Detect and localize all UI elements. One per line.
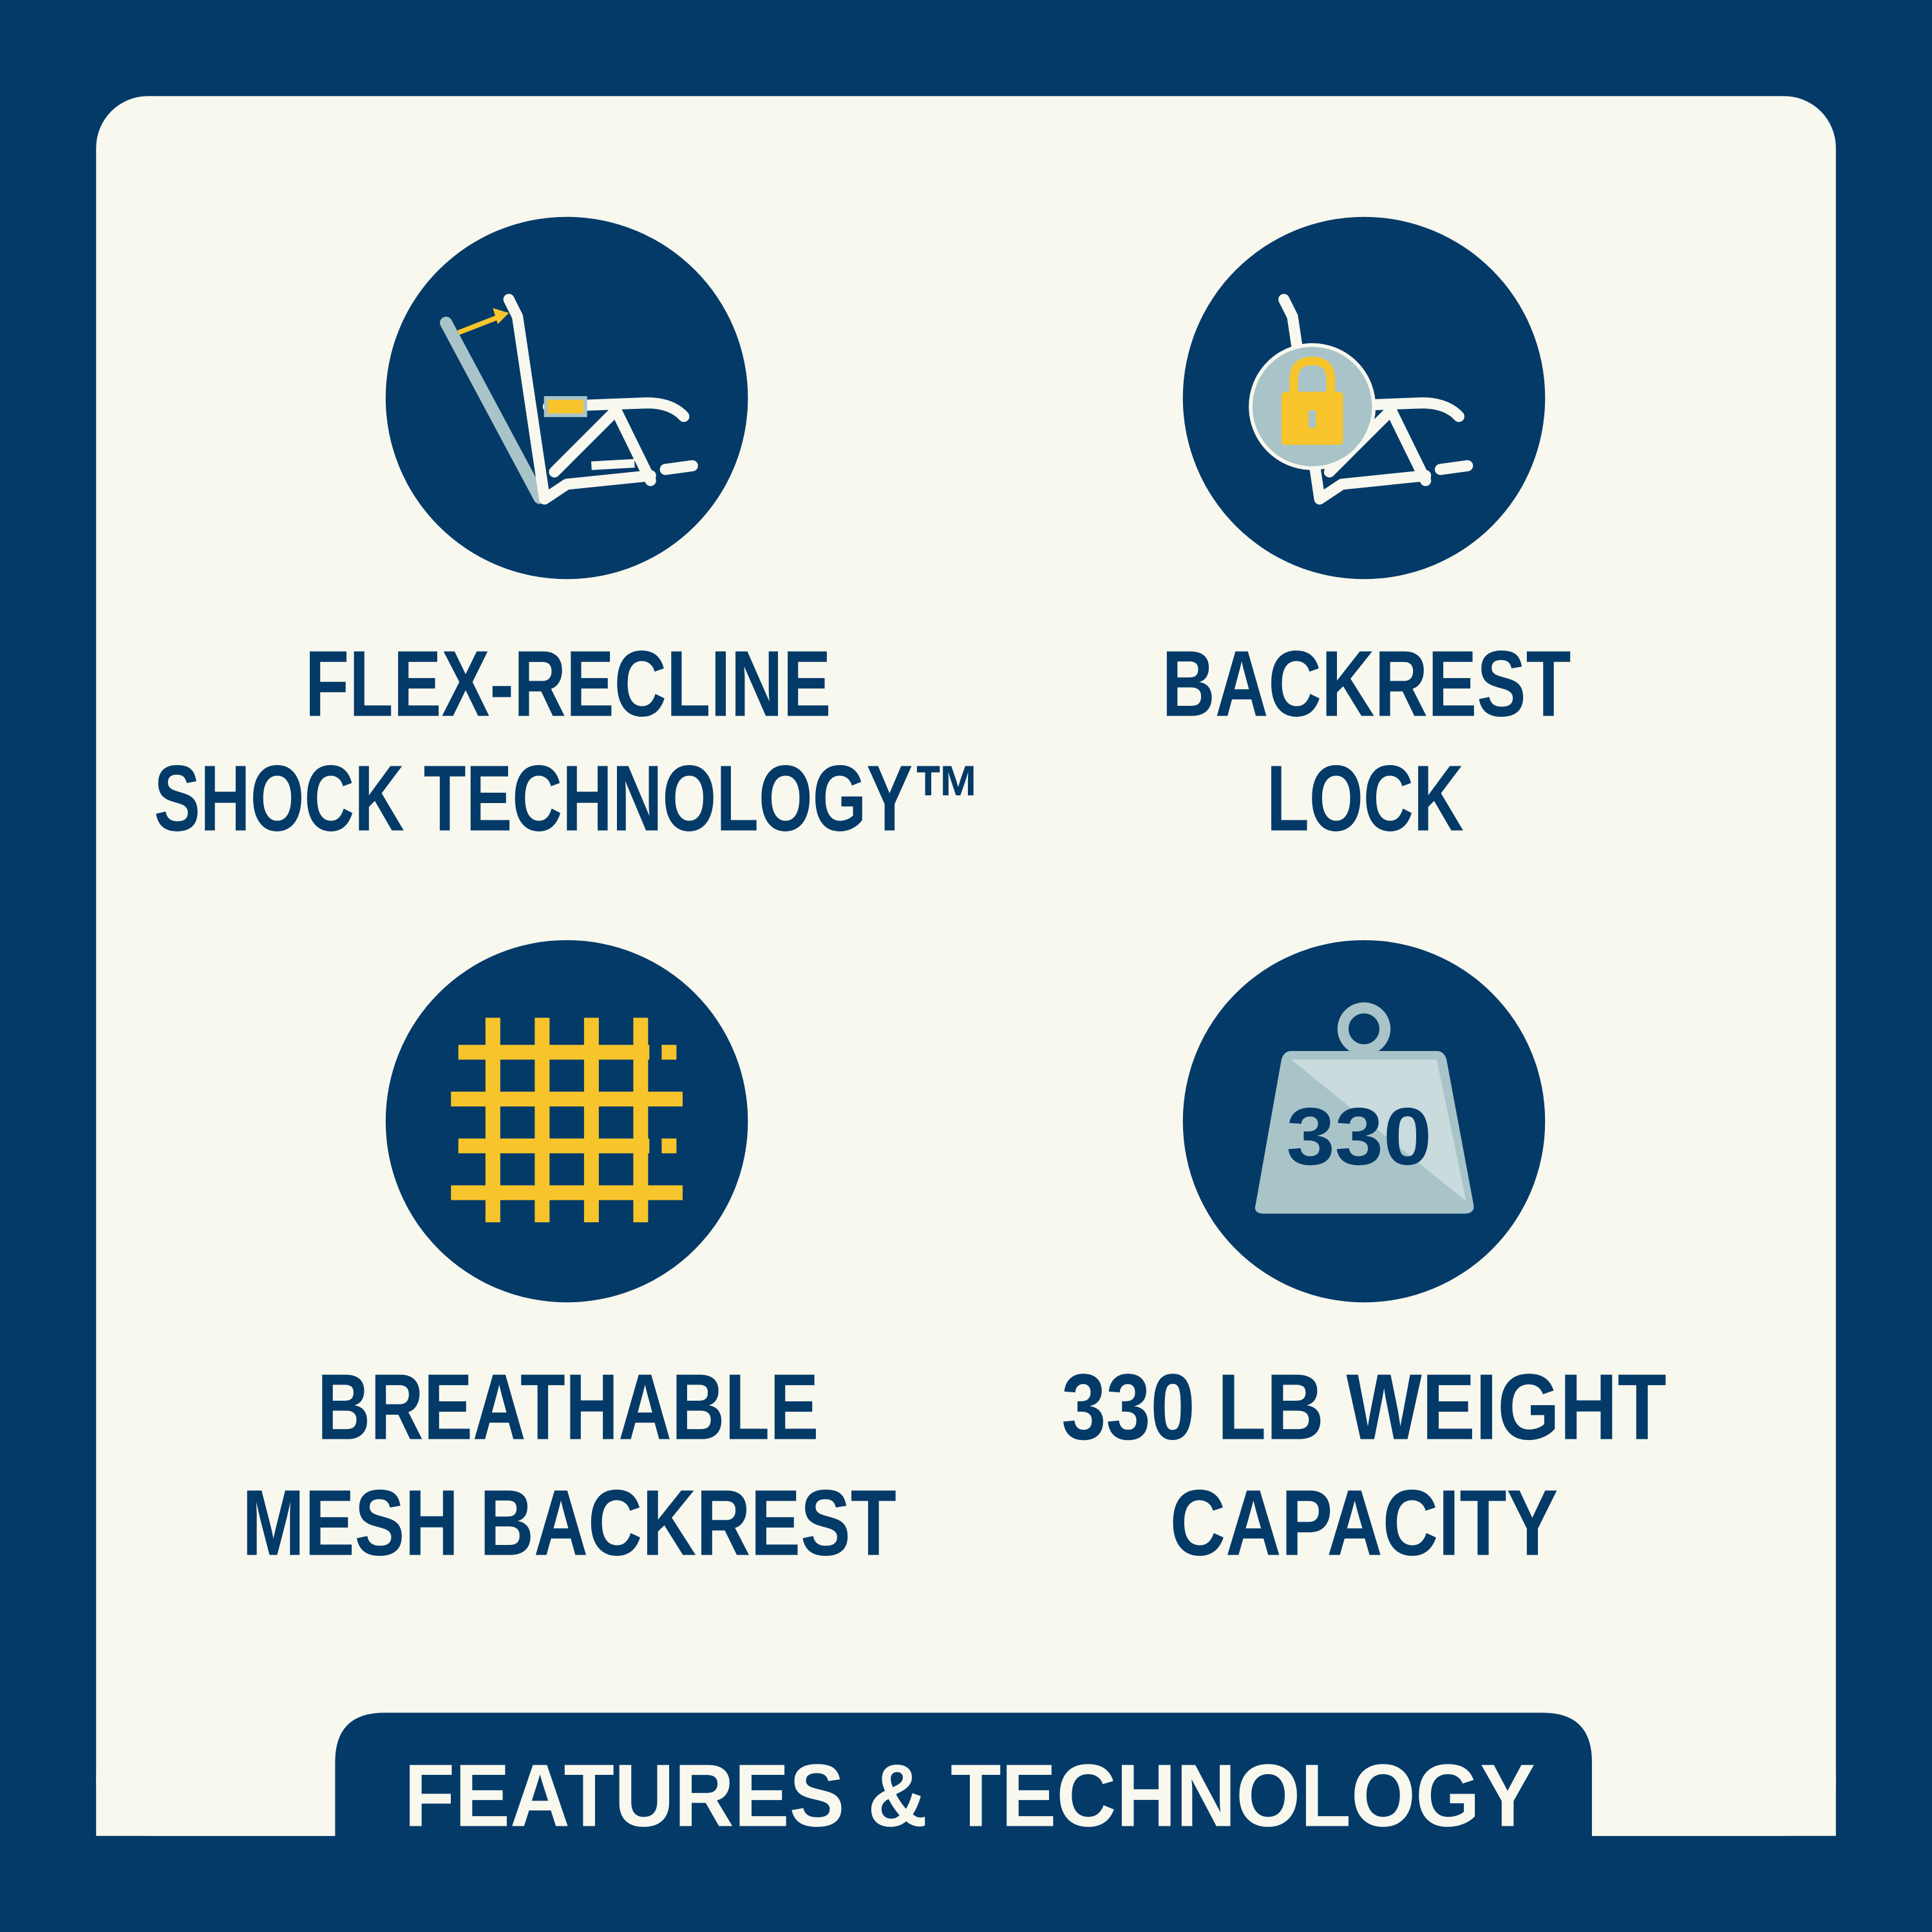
icon: mesh xyxy=(386,940,748,1302)
icon: backrest lock xyxy=(1183,217,1545,579)
icon: weight 330: 330 xyxy=(1286,1091,1432,1182)
footer tab: FEATURES & TECHNOLOGY xyxy=(404,1746,1535,1845)
icon: flex-recline chair xyxy=(386,217,748,579)
text: breathable mesh: MESH BACKREST xyxy=(242,1470,896,1575)
text: backrest lock: LOCK xyxy=(1267,746,1464,851)
text: backrest lock xyxy=(1162,631,1571,851)
text: weight capacity: 330 LB WEIGHT xyxy=(1061,1354,1667,1459)
text: flex-recline xyxy=(154,631,982,851)
footer tab xyxy=(335,1712,1592,1932)
text: flex-recline: FLEX-RECLINE xyxy=(305,631,831,736)
text: breathable mesh xyxy=(242,1354,896,1575)
icon: weight 330 xyxy=(1183,940,1545,1302)
text: flex-recline: SHOCK TECHNOLOGY™ xyxy=(154,746,982,851)
text: breathable mesh: BREATHABLE xyxy=(317,1354,819,1459)
text: weight capacity: CAPACITY xyxy=(1170,1470,1558,1575)
text: weight capacity xyxy=(1061,1354,1667,1575)
text: backrest lock: BACKREST xyxy=(1162,631,1571,736)
